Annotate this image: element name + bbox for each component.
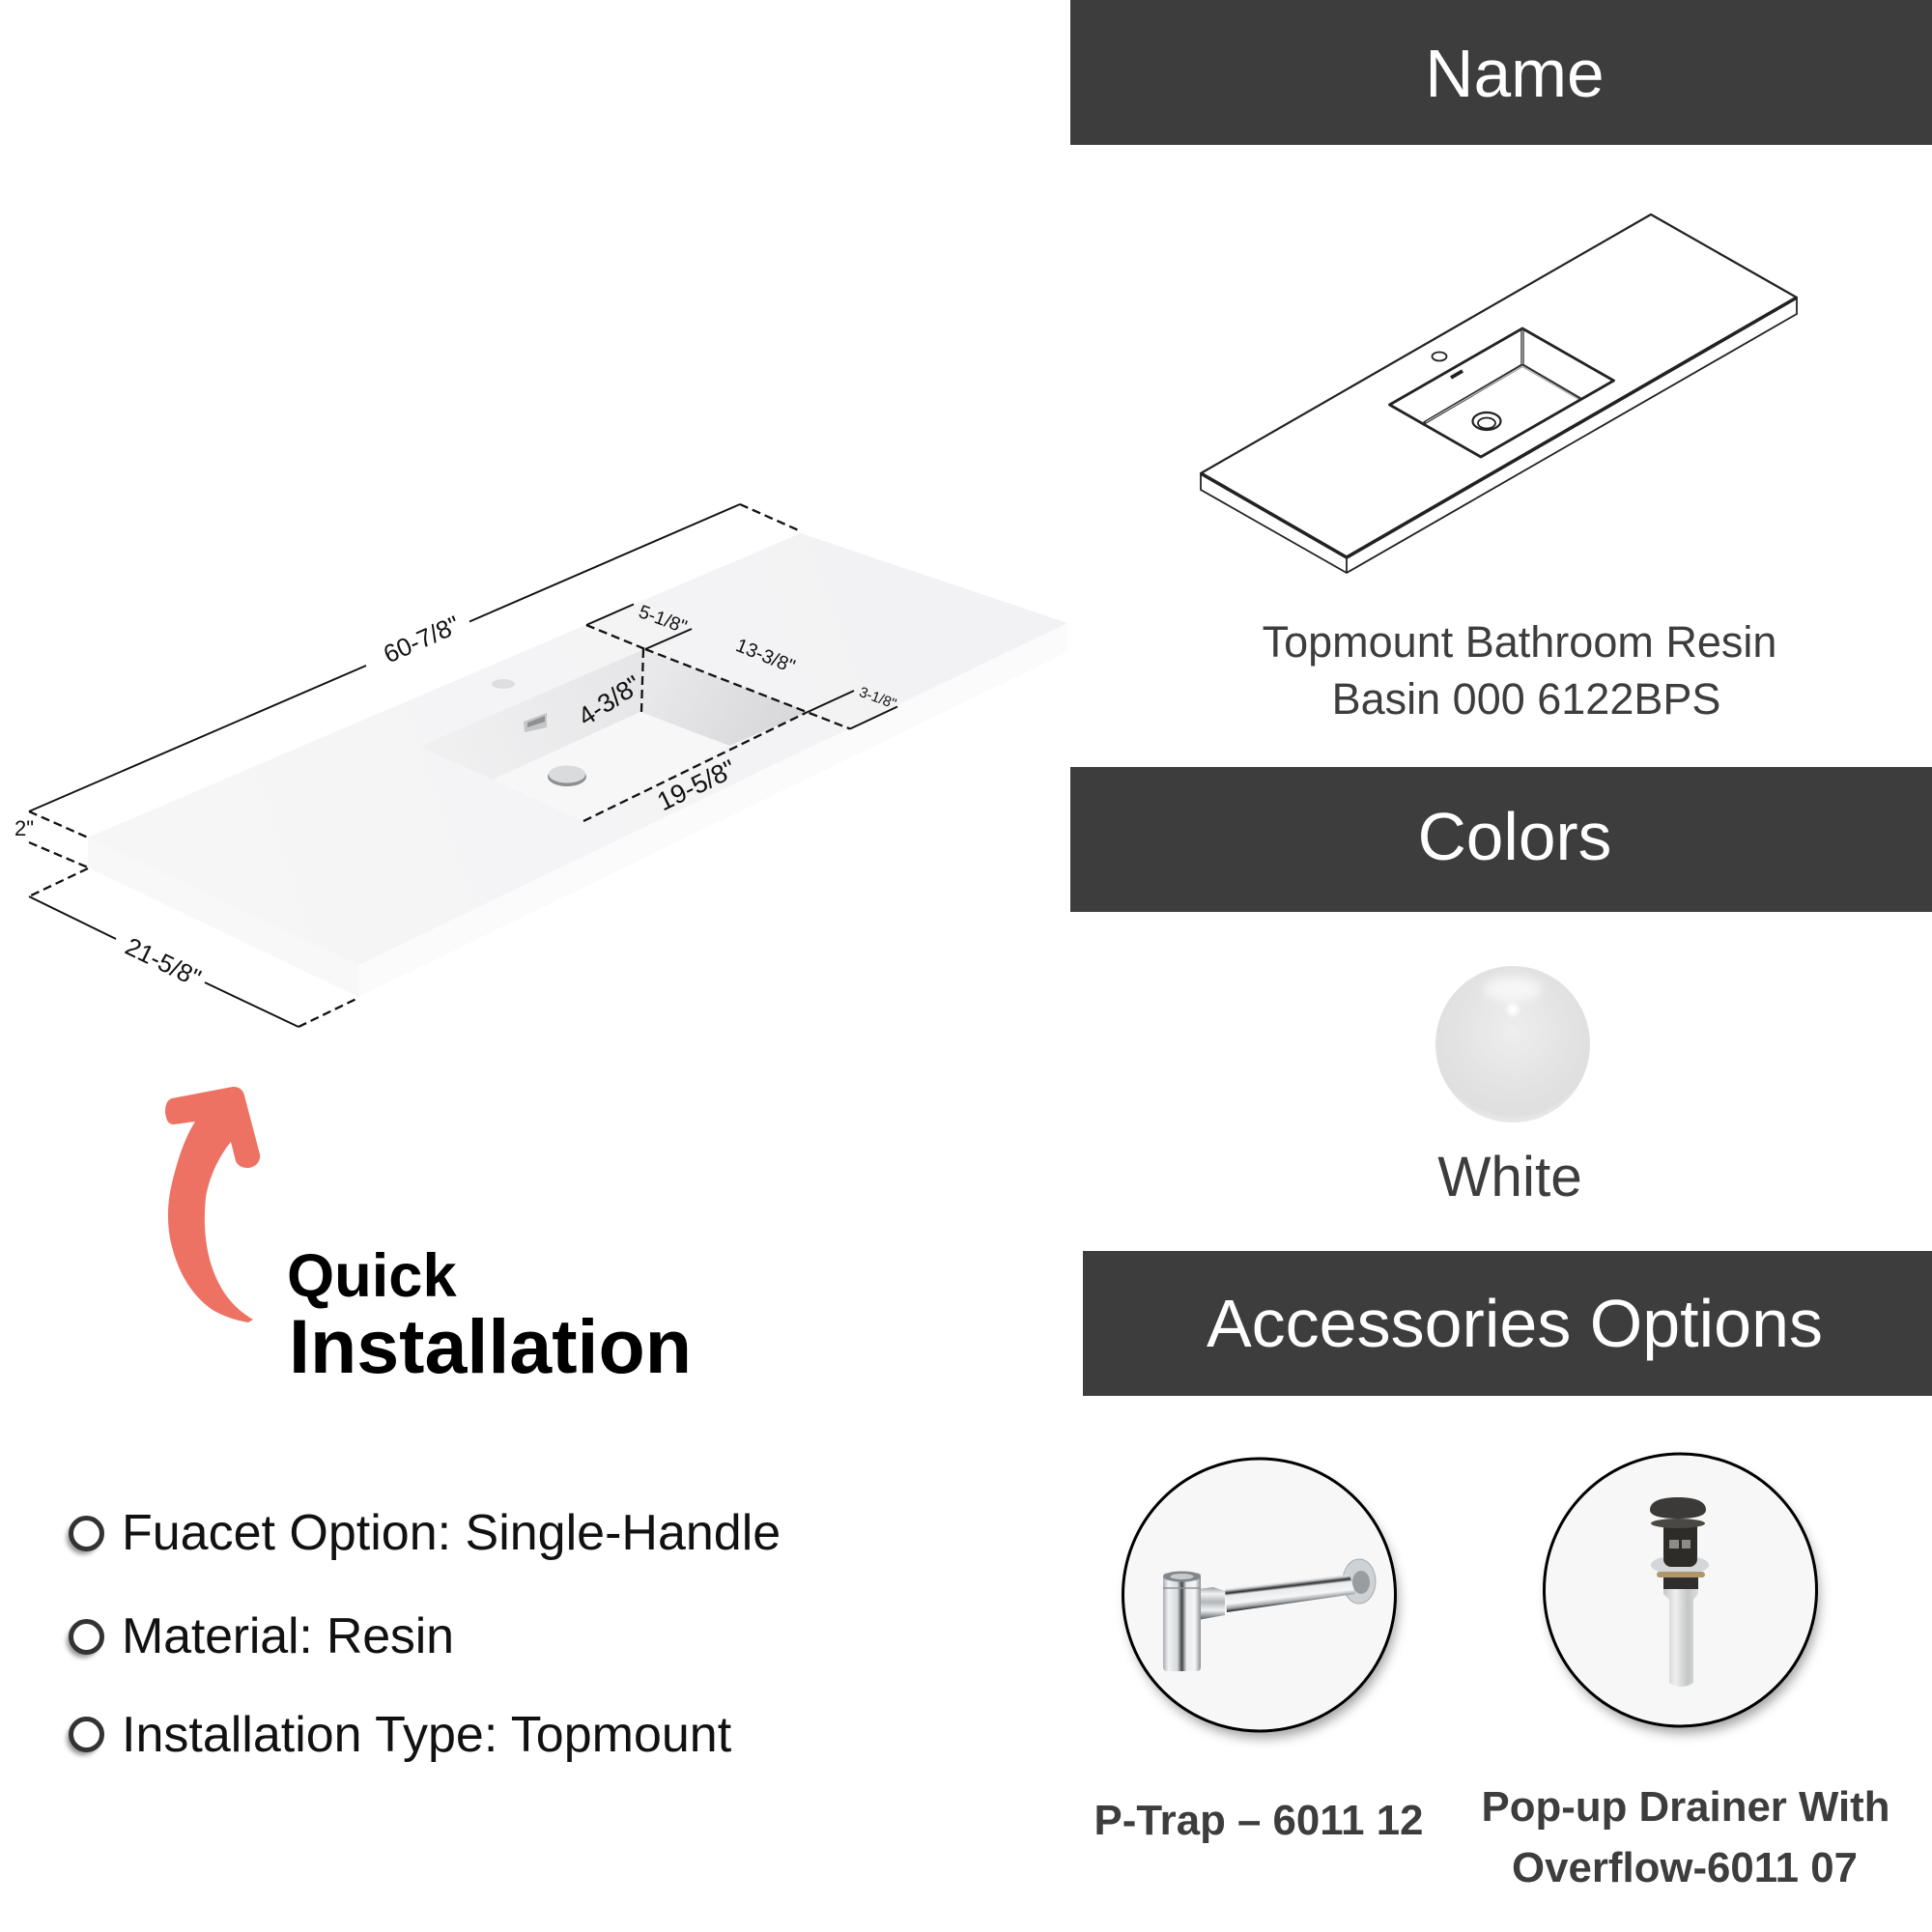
heading: Quick Installation bbox=[287, 1242, 692, 1389]
header: Colors: Colors bbox=[1418, 799, 1611, 874]
feature: faucet option: Fuacet Option: Single-Handle bbox=[122, 1505, 781, 1561]
dimension lines bbox=[29, 504, 897, 1027]
accessory labels: P-Trap – 6011 12 bbox=[1094, 1797, 1423, 1844]
accessory: P-Trap bbox=[1122, 1459, 1398, 1738]
heading: Quick Installation: Installation bbox=[289, 1303, 692, 1389]
line drawing of basin bbox=[1201, 214, 1797, 573]
product name: Topmount Bathroom Resin bbox=[1263, 617, 1776, 667]
dimension labels: 2" bbox=[14, 816, 34, 840]
header: Accessories Options bbox=[1083, 1251, 1932, 1396]
accessory labels bbox=[1094, 1783, 1889, 1891]
dimension labels: 13-3/8" bbox=[733, 635, 798, 678]
colour label: White bbox=[1437, 1146, 1582, 1208]
header: Colors bbox=[1070, 767, 1932, 912]
colour swatch: white ball bbox=[1435, 966, 1590, 1122]
accessory labels: Overflow-6011 07 bbox=[1512, 1844, 1858, 1891]
dimension labels: 60-7/8" bbox=[379, 610, 464, 668]
arrow bbox=[165, 1087, 260, 1322]
heading: Quick Installation: Quick bbox=[287, 1242, 457, 1310]
accessory labels: Pop-up Drainer With bbox=[1482, 1783, 1889, 1831]
dimension labels bbox=[14, 601, 898, 993]
feature: installation type: Installation Type: Topmount bbox=[122, 1707, 732, 1763]
header: Name bbox=[1070, 0, 1932, 145]
dimension labels: 4-3/8" bbox=[573, 669, 646, 731]
sink render bbox=[88, 533, 1067, 997]
header: Name: Name bbox=[1425, 36, 1605, 111]
accessory: pop-up drainer bbox=[1544, 1454, 1819, 1733]
product name: Basin 000 6122BPS bbox=[1332, 674, 1720, 724]
dimension labels: 5-1/8" bbox=[636, 601, 690, 639]
dimension labels: 19-5/8" bbox=[653, 754, 740, 816]
dimension labels: 21-5/8" bbox=[121, 931, 206, 993]
dimension labels: 3-1/8" bbox=[857, 684, 898, 713]
header: Accessories Options: Accessories Options bbox=[1207, 1286, 1823, 1361]
feature list bbox=[67, 1505, 781, 1763]
product name bbox=[1263, 617, 1776, 724]
feature: material: Material: Resin bbox=[122, 1608, 454, 1664]
